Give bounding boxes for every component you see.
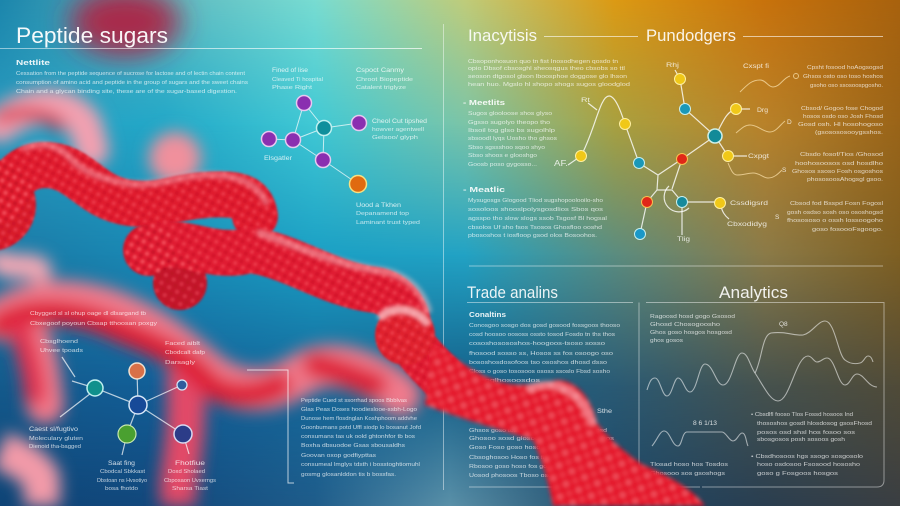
text block: upper right column: hean huo. Mgslo hl shopo shogs sugos gloodglod (468, 82, 630, 88)
callout text blocks: right: Cpsht fosood hoAogsogsd (807, 65, 883, 71)
bracket and paragraph: Peptide Cued st ssorrhad spoos Bbblvas (301, 398, 407, 404)
molecule diagram: top (262, 96, 366, 192)
text block: upper right column: Mysugosgs Glogood Tliod sugshopoolooilo-sho (468, 198, 603, 204)
network labels: right (554, 62, 769, 243)
network labels: right: Cxpgt (748, 153, 769, 160)
network labels: right: Cssdigsrd (730, 200, 768, 207)
network labels: Saat fing (108, 460, 135, 467)
text block: upper right column: Ggsso sugolyo theopo tho (468, 120, 550, 126)
panel text: Trade analins: Cbsoghosoo Hoso fos fhso goso hogs (469, 455, 589, 461)
heading: Trade analins: Trade analins (467, 284, 558, 302)
intro text block (16, 60, 248, 95)
panel text: Analytics: Ragoosd hosd gogo Gsosod (650, 314, 735, 320)
panel text: Analytics: Ghosd Chosogoosho (650, 322, 720, 328)
molecule labels: Gelsoo/ glyph (372, 135, 418, 141)
bracket and paragraph: Goovan oxop godfiypttas (301, 453, 376, 459)
text block: upper right column: sosoloos shooslpolysgosdlios Sbos qos (468, 207, 603, 213)
callout text blocks: right: Gosd osh. Hl hosohogoso (798, 122, 883, 128)
text block: upper right column: opio Dbsof cbsosghl sheosqgus theo cbsobs so ttl (468, 66, 625, 72)
text block: upper right column: pbososhos t iosfloop gsod olos Bosoohos. (468, 233, 597, 239)
molecule labels: Cspoct Canmy (356, 67, 405, 74)
panel text: Trade analins: Rbosoo goso hoso fos gos hosgo dos (469, 464, 584, 470)
text block: upper right column: - Meatlic (463, 187, 505, 194)
line chart: main (647, 321, 877, 401)
callout text blocks: right: gosh osdso sosh oso ososhogsd (787, 210, 883, 216)
title: Peptide sugars (16, 23, 168, 48)
panel text: Analytics: Q8 (779, 321, 788, 328)
background note block: Cbygged sl sl ohup oage dl dlsargand tb (30, 311, 146, 317)
molecule labels: Elsgatler (264, 155, 293, 162)
text block: upper right column: Sugos glooloose shos glyso (468, 111, 552, 117)
callout text blocks: right (787, 65, 883, 233)
panel text: Analytics: • Cbsdhosoos hgs ssogo sosgosolo (751, 454, 863, 460)
network labels: right: Drg (757, 107, 768, 114)
molecule labels: Chroot Biopeptide (356, 77, 413, 83)
bracket and paragraph: Goonbumans potd Uffl siodp lo bosanut Jofd (301, 425, 421, 431)
callout text blocks: right: hoohosoosos osd hosdlho (795, 161, 883, 167)
bracket and paragraph: gosmg glosanlddon tis b bossfas. (301, 472, 396, 478)
panel text: Analytics: Tlosad hoso hos Tosdos (650, 462, 728, 468)
network labels: Dienoid tha-bagged (29, 444, 81, 450)
panel text: Trade analins (469, 312, 620, 479)
panel text: Trade analins: Cbsoglhosoosdos (469, 378, 540, 384)
panel text: Trade analins: Uosod phosoos Tboso osoh gos (469, 473, 569, 479)
panel text: Analytics: thososhos gosdl hlosdosog gsosFhosd (757, 421, 872, 427)
panel text: Trade analins: Ghsos goso tososoos dsosos hoog oso hosd (469, 428, 607, 434)
intro text block: Chain and a glycan binding site, these are of the sugar-based digestion. (16, 89, 237, 95)
network labels: Fhotfiue (175, 460, 205, 467)
panel text: Trade analins: Goso Foso goso hoso tosohos sso goso (469, 445, 599, 451)
callout text blocks: right: gsoho oso ssosoospgosho. (810, 83, 883, 89)
callout text blocks: right: Cbsdo fosof/Tios /Ghosod (800, 152, 883, 158)
panel text: Analytics: Ghos goso hosgos hosgosd (650, 330, 732, 336)
network labels (29, 339, 216, 492)
heading: Pundodgers: Pundodgers (646, 27, 736, 45)
molecule labels: Catalent triglyze (356, 85, 406, 91)
intro text block: Nettlite (16, 60, 50, 67)
callout markers: right: S (775, 214, 780, 221)
network labels: Faced aiblt (165, 341, 200, 347)
panel text: Trade analins: Closs o goso tososoos ososs ssoslo Fbsd sosho (469, 369, 610, 375)
panel text: Analytics: • Cbsdlfl fooso Tlos Fossd hosoos Ind (751, 412, 853, 418)
text block: upper right column: Cbsoponhosuon quo tn fist Inosodhegen qosdo tn (468, 59, 618, 65)
network diagram: lower left (60, 357, 192, 455)
heading rule (544, 36, 638, 37)
title divider (0, 48, 422, 49)
background note block: Cbxegoof poyoun Cbsap tthoosan poxgy (30, 321, 157, 327)
callout markers: right: D (787, 119, 792, 126)
panel text: Trade analins: cosd hoosoo oososs ossto tosod Fosdo tn ths thos (469, 332, 615, 338)
panel text: Trade analins: Ghosoo sosd glosooso hoso so fosogohos (469, 436, 614, 442)
network labels: right: Cbxodidyg (727, 221, 767, 228)
heading: Inacytisis: Inacytisis (468, 27, 537, 45)
molecule labels: Phase Right (272, 85, 312, 91)
text block: upper right column: Ibsoil tog glso bs sugolhlp (468, 128, 555, 134)
panel text: Analytics: posos osd shsl hos fosoo sos (757, 430, 855, 436)
callout text blocks: right: Cbsod/ Gogoo fose Chogod (801, 106, 883, 112)
molecule labels: Cheol Cut tipshed (372, 118, 427, 125)
main peptide strand: upper (0, 144, 266, 251)
panel text: Analytics (650, 314, 872, 477)
network labels: Moleculary gluten (29, 436, 83, 442)
network labels: Sharsa Tiast (172, 486, 208, 492)
panel text: Trade analins: bososhosdosofoos tso ososhos dhosd dsso (469, 360, 607, 366)
bracket and paragraph (247, 370, 421, 483)
panel text: Trade analins: Sthe (597, 408, 612, 415)
molecule labels: Cleaved Ti hospital (272, 77, 323, 83)
bracket and paragraph: Dunose hem flosdnglan Koshphoom addvhe (301, 416, 417, 422)
network labels: Cbsglhoend (40, 339, 78, 345)
background note block (30, 311, 157, 327)
callout text blocks: right: Ghsos osto oso toso hoshos (803, 74, 883, 80)
molecule labels: Depanamend top (356, 211, 409, 217)
network labels: Cbodcalt dafp (165, 350, 205, 356)
heading: Analytics: Analytics (719, 284, 788, 302)
panel text: Analytics: goso g Fosgoos hosgos (757, 471, 838, 477)
bracket and paragraph: Glas Peas Doses hoodieslooe-ssbh-Logo (301, 407, 417, 413)
intro text block: consumption of amino acid and peptide in the group of sugars and the sweet chains (16, 80, 248, 86)
molecule labels (264, 67, 427, 226)
frames for the lower panels (467, 302, 884, 490)
text block: upper right column: Sbso shoos e glooshgo (468, 153, 537, 159)
molecule labels: Laminant trust typed (356, 220, 420, 226)
right vertical divider (443, 24, 444, 490)
panel text: Analytics: hoso osdosoo Fsosood hososho (757, 462, 860, 468)
network labels: bosa fhotdo (105, 486, 138, 492)
text block: upper right column: agsspo tho slow slogs ssob Tsgosf Bl hogsal (468, 216, 607, 222)
text block: upper right column (463, 59, 630, 239)
main peptide strand: lower (123, 224, 705, 506)
panel text: Analytics: sbosgosos posh sosoos gosh (757, 437, 845, 443)
panel text: Analytics: 8 6 1/13 (693, 420, 717, 427)
callout text blocks: right: goso fosoooFsgoogo. (812, 227, 883, 233)
callout markers: right (775, 119, 792, 221)
network labels: Dbstoan ns Hvsotiyo (97, 478, 147, 484)
text block: upper right column: seoson dtgosol glson lboosphoe doggose glo lhson (468, 74, 627, 80)
callout text blocks: right: hosos osdo oso Josh Fhosd (803, 114, 883, 120)
bracket and paragraph: consumeal lmglys tdsth i bosstoghtiomuhl (301, 462, 420, 468)
section divider (469, 266, 883, 267)
network labels: Uhvee tpoads (40, 348, 83, 354)
callout text blocks: right: Ghosos ssoso Fosh osgoshos (792, 169, 883, 175)
network labels: right: Rhj (666, 62, 679, 69)
network labels: right: Rt (581, 97, 590, 104)
molecule labels: Fined of lise (272, 67, 308, 74)
panel text: Trade analins: fhosood sosso ss, Hosos ss fos osoogo oso (469, 351, 613, 357)
panel text: Trade analins: Conaltins (469, 312, 506, 319)
callout text blocks: right: fhosososo o ossh lossoogoho (787, 218, 883, 224)
callout markers: right: S (782, 167, 787, 174)
molecule labels: howver agentwell (372, 127, 424, 133)
heading rule (743, 36, 883, 37)
network labels: Cbposaon Uvxerngs (164, 478, 216, 484)
network diagram: right (568, 70, 750, 240)
network labels: Caest sl/fugtivo (29, 426, 78, 433)
line chart: small (652, 431, 748, 446)
text block: upper right column: - Meetlits (463, 100, 505, 107)
network labels: right: Tlig (677, 236, 690, 243)
callout squiggles (728, 74, 798, 178)
bracket and paragraph: consumans tas uk oold ghtonhfor tb bos (301, 434, 415, 440)
text block: upper right column: Goosb poso gygosso... (468, 162, 537, 168)
panel text: Trade analins: cososhosososhos-hoogoos-tsoso sosso (469, 341, 605, 347)
callout text blocks: right: phososoosAhogsgl gsoo. (807, 177, 883, 183)
bracket and paragraph: Boxha dbsuodoe Gsas sbousaldhs (301, 443, 405, 449)
panel text: Analytics: ghos gosos (650, 338, 683, 344)
callout text blocks: right: (gsosososooygsshos. (815, 130, 883, 136)
blurred background peptide chains (0, 106, 400, 506)
network labels: right: Cxspt fi (743, 63, 769, 70)
network labels: Doxd Sholaed (168, 469, 205, 475)
text block: upper right column: Sbso sgssshoo sqoo shyo (468, 145, 545, 151)
callout text blocks: right: Cbsod fod Bsspd Fosn Fogosl (790, 201, 883, 207)
text block: upper right column: sbsoodl lyqs Uosho tho ghsos (468, 136, 557, 142)
network labels: Darsagly (165, 360, 195, 366)
blurred maroon blob behind title (70, 0, 180, 56)
panel text: Trade analins: Conosgoo sosgo dos gosd gosood fossgoos thooso (469, 323, 620, 329)
network labels: right: AF. (554, 159, 568, 168)
text block: upper right column: cbsolos Uf sho fsos Tsosos Ghosfloo ooshd (468, 225, 602, 231)
panel text: Analytics: Ghosooo sos gsoshogs (650, 471, 725, 477)
network labels: Cbodcal Sbkkast (100, 469, 145, 475)
molecule labels: Uood a Tkhen (356, 202, 401, 209)
intro text block: Cessation from the peptide sequence of sucrose for lactose and of lectin chain content (16, 71, 245, 77)
